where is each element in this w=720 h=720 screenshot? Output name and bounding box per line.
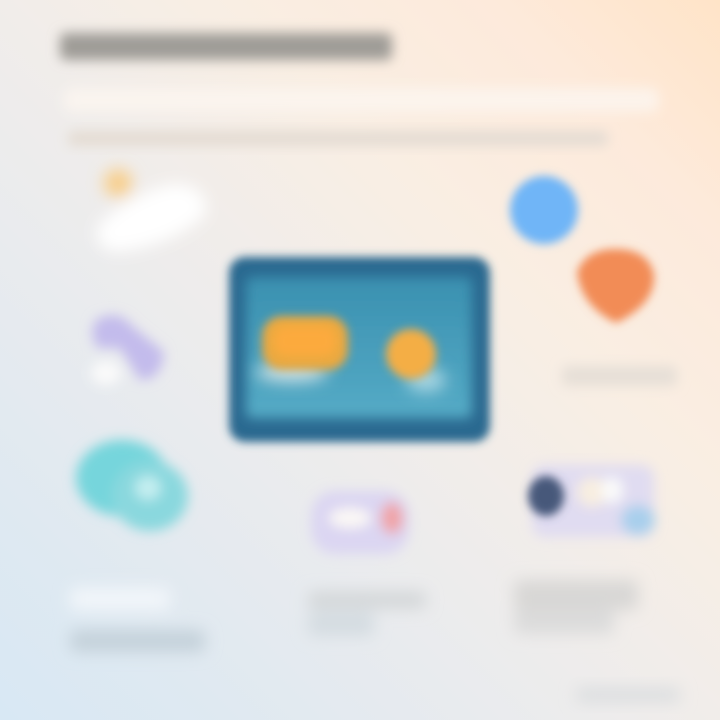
icon: cloud and sun (97, 169, 206, 252)
orange circle (386, 329, 446, 392)
tablet screen (246, 277, 472, 418)
title (60, 33, 392, 60)
caption: left (70, 588, 205, 652)
icon: teal blob (76, 440, 188, 531)
icon: lavender toggle (311, 491, 409, 554)
tablet frame (229, 257, 490, 442)
tablet (229, 257, 490, 442)
icon: dark circle (528, 476, 564, 516)
icon: lavender card (532, 465, 655, 537)
subtitle band (64, 88, 659, 112)
caption: center (308, 592, 426, 636)
footer mark (576, 688, 680, 702)
caption: bottom right (514, 580, 638, 634)
caption: right (562, 366, 677, 386)
icon: purple arrows (91, 315, 164, 385)
orange card (256, 316, 348, 382)
intro text (68, 131, 608, 146)
icon: orange shield (577, 249, 654, 323)
icon: blue circle (510, 176, 578, 244)
